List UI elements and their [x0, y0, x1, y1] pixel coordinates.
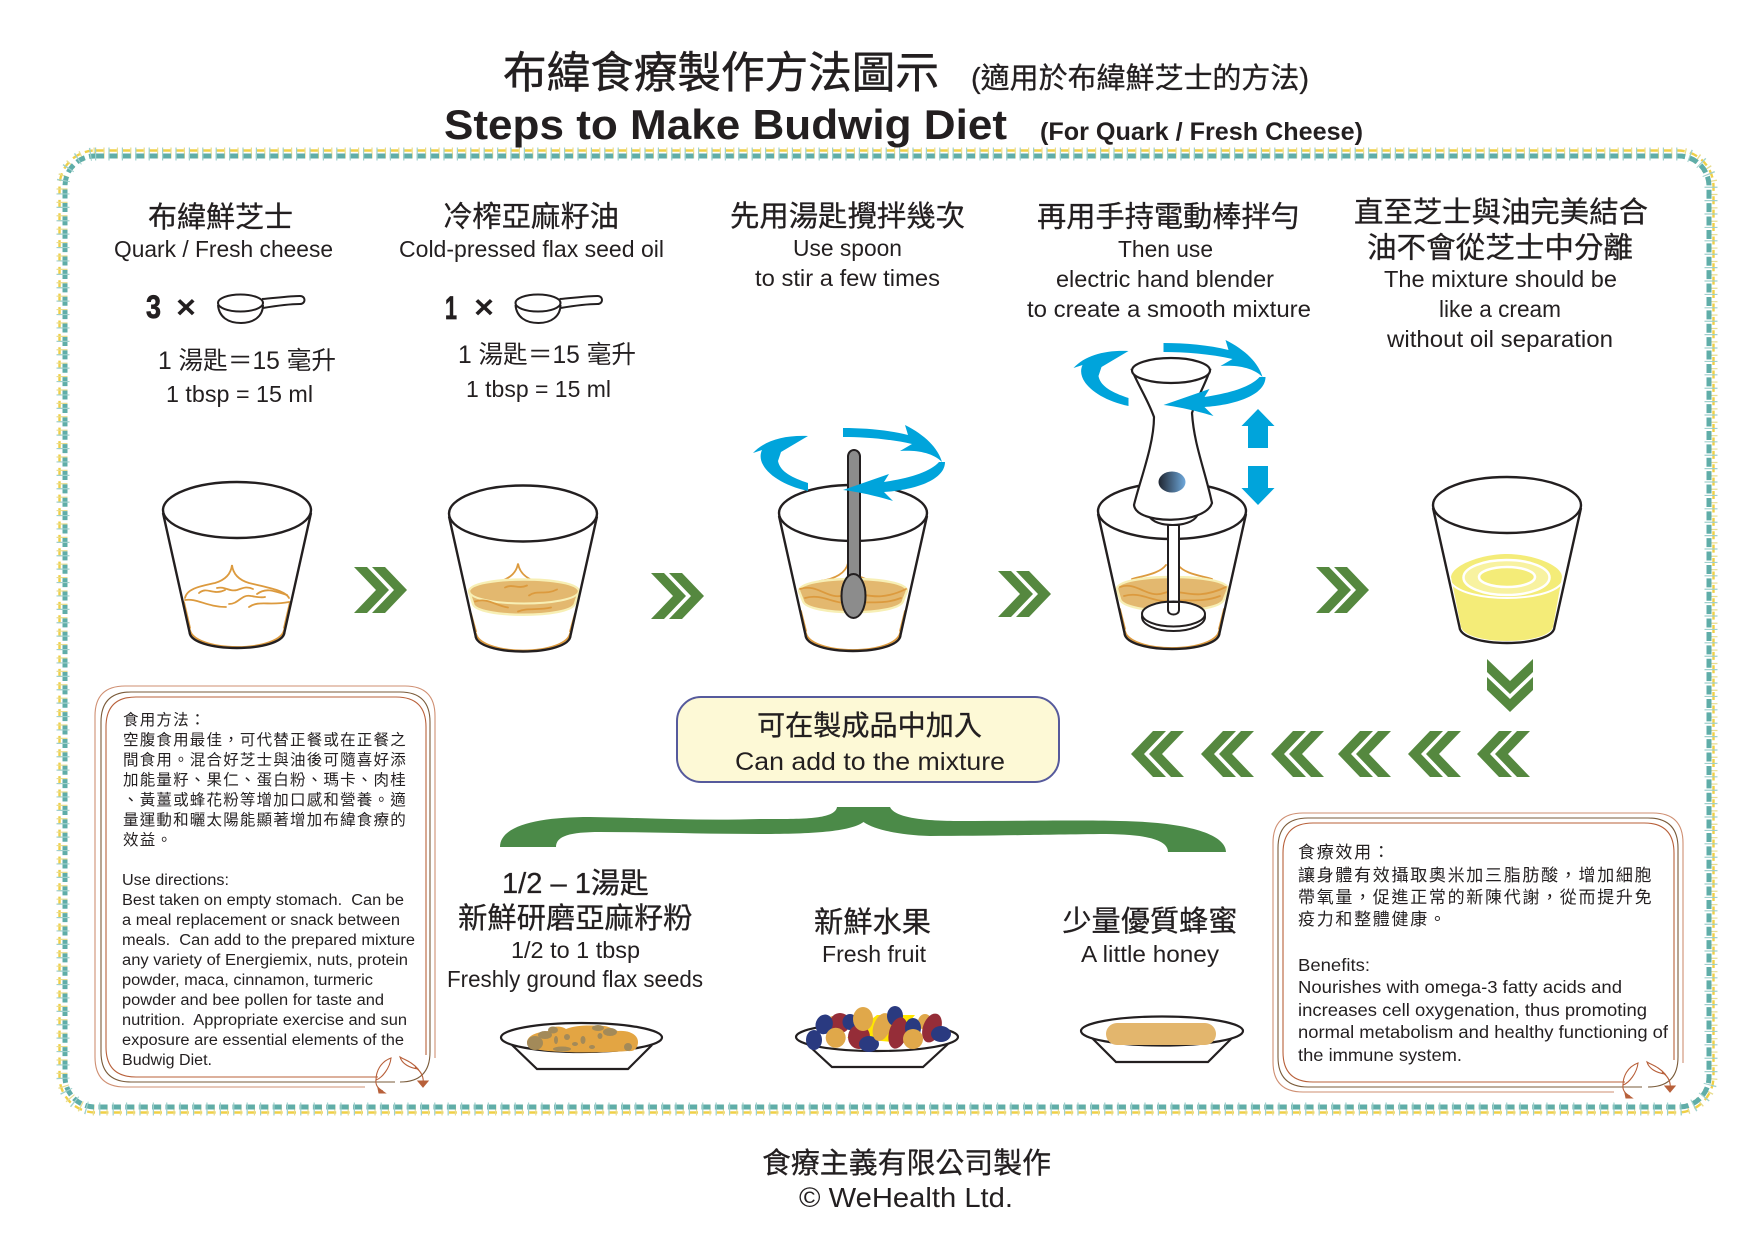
column 4: hand blender: electric hand blender: [1056, 266, 1274, 292]
text: chinese directions: 空腹食用最佳，可代替正餐或在正餐之: [123, 731, 407, 749]
text: english directions: nutrition. Appropriate exercise and sun: [122, 1012, 407, 1029]
cup 3: stirring with spoon: [753, 425, 945, 651]
arrows: leftward row: [1131, 731, 1530, 777]
cup 2: quark with oil: [449, 486, 597, 652]
title: 布緯食療製作方法圖示: [503, 50, 939, 98]
ingredient: fresh fruit: Fresh fruit: [822, 941, 927, 967]
column 4: hand blender: [1027, 200, 1311, 322]
ingredient: flax seeds: [447, 868, 703, 1069]
callout: can add to the mixture: Can add to the mixture: [735, 748, 1005, 776]
column 1: quark: 3: [146, 289, 161, 325]
column 1: quark: Quark / Fresh cheese: [114, 236, 333, 262]
text: english directions: Use directions:: [122, 872, 229, 889]
column 5: smooth result: [1354, 196, 1648, 352]
arrow: cup 1 to cup 2: [354, 567, 407, 613]
text: english directions: meals. Can add to the prepared mixture: [122, 932, 415, 949]
ingredient: flax seeds: 1/2 to 1 tbsp: [511, 937, 640, 963]
ingredient: honey: A little honey: [1081, 941, 1220, 967]
title: [444, 50, 1363, 148]
text: chinese directions: 食用方法：: [123, 711, 207, 729]
arrow: down: [1487, 659, 1533, 712]
title: (For Quark / Fresh Cheese): [1040, 118, 1363, 146]
ingredient: flax seeds: 新鮮研磨亞麻籽粉: [458, 902, 692, 935]
cup 1: quark: [163, 482, 311, 648]
icon: rotation arrows: [1074, 340, 1266, 416]
text: chinese directions: 加能量籽、果仁、蛋白粉、瑪卡、肉桂: [123, 771, 407, 789]
curly bracket: [500, 807, 1226, 852]
column 1: quark: 布緯鮮芝士: [148, 201, 293, 234]
text: english benefits: normal metabolism and healthy functioning of: [1298, 1022, 1668, 1042]
icon: bowl of honey: [1081, 1016, 1243, 1062]
column 2: flax oil: ×: [474, 289, 494, 325]
column 5: smooth result: 直至芝士與油完美結合: [1354, 196, 1648, 229]
text: english directions: Budwig Diet.: [122, 1052, 212, 1069]
text: english directions: any variety of Energiemix, nuts, protein: [122, 952, 408, 969]
callout: can add to the mixture: 可在製成品中加入: [757, 710, 982, 741]
icon: tablespoon: [218, 294, 304, 323]
ingredient: fresh fruit: [796, 906, 958, 1067]
footer credit: 食療主義有限公司製作: [762, 1147, 1051, 1180]
column 2: flax oil: [399, 200, 664, 402]
column 3: stir with spoon: Use spoon: [793, 235, 902, 261]
text: english directions: Best taken on empty stomach. Can be: [122, 892, 404, 909]
text: english benefits: [1298, 955, 1668, 1065]
text: chinese directions: [123, 711, 407, 849]
icon: spoon: [842, 450, 866, 618]
icon: bowl of ground seeds: [501, 1023, 662, 1069]
text: chinese benefits: [1298, 843, 1653, 929]
column 1: quark: ×: [176, 289, 196, 325]
ingredient: flax seeds: 1/2 – 1湯匙: [502, 868, 649, 900]
text: english directions: powder and bee pollen for taste and: [122, 992, 384, 1009]
column 2: flax oil: 1 tbsp = 15 ml: [466, 376, 611, 402]
text: english benefits: Nourishes with omega-3 fatty acids and: [1298, 977, 1622, 997]
column 2: flax oil: 1: [445, 290, 457, 326]
text: chinese directions: 效益。: [123, 831, 173, 849]
ingredient: honey: 少量優質蜂蜜: [1062, 905, 1237, 938]
text: english benefits: Benefits:: [1298, 955, 1370, 975]
title: Steps to Make Budwig Diet: [444, 101, 1007, 148]
text: chinese benefits: 疫力和整體健康。: [1298, 910, 1448, 929]
text: chinese directions: 、黃薑或蜂花粉等增加口感和營養。適: [123, 790, 407, 809]
decorative stitched frame: [60, 150, 1714, 1112]
flourish: [376, 1057, 428, 1093]
column 1: quark: [114, 201, 336, 407]
column 3: stir with spoon: 先用湯匙攪拌幾次: [730, 200, 965, 233]
text: english benefits: the immune system.: [1298, 1045, 1462, 1065]
text: english directions: a meal replacement or snack between: [122, 912, 400, 929]
column 2: flax oil: Cold-pressed flax seed oil: [399, 236, 664, 262]
cup 5: finished cream: [1433, 477, 1581, 643]
ingredient: flax seeds: Freshly ground flax seeds: [447, 966, 703, 992]
flourish: [1623, 1062, 1675, 1098]
text: chinese benefits: 帶氧量，促進正常的新陳代謝，從而提升免: [1298, 888, 1653, 907]
ingredient: fresh fruit: 新鮮水果: [814, 906, 931, 939]
column 3: stir with spoon: [730, 200, 965, 291]
text: english directions: [122, 872, 415, 1069]
column 3: stir with spoon: to stir a few times: [755, 265, 940, 291]
column 5: smooth result: The mixture should be: [1384, 266, 1617, 292]
text: english benefits: increases cell oxygenation, thus promoting: [1298, 1000, 1647, 1020]
callout: can add to the mixture: [677, 697, 1059, 782]
icon: hand blender: [1132, 358, 1212, 631]
panel: benefits: [1273, 813, 1683, 1098]
title: (適用於布緯鮮芝士的方法): [971, 62, 1309, 95]
column 5: smooth result: like a cream: [1439, 296, 1561, 322]
column 4: hand blender: 再用手持電動棒拌勻: [1037, 200, 1300, 234]
footer credit: [762, 1147, 1051, 1213]
column 2: flax oil: 冷榨亞麻籽油: [443, 200, 619, 234]
text: chinese directions: 間食用。混合好芝士與油後可隨喜好添: [123, 751, 407, 769]
column 5: smooth result: without oil separation: [1386, 326, 1613, 352]
icon: up and down arrows: [1242, 409, 1274, 505]
text: english directions: powder, maca, cinnamon, turmeric: [122, 972, 373, 989]
column 5: smooth result: 油不會從芝士中分離: [1367, 232, 1633, 264]
arrow: cup 3 to cup 4: [998, 571, 1051, 617]
cup 4: blending: [1074, 340, 1274, 649]
column 1: quark: 1 湯匙＝15 毫升: [158, 347, 336, 375]
column 4: hand blender: to create a smooth mixture: [1027, 296, 1311, 322]
footer credit: © WeHealth Ltd.: [799, 1182, 1013, 1213]
text: chinese benefits: 讓身體有效攝取奧米加三脂肪酸，增加細胞: [1298, 865, 1653, 885]
column 2: flax oil: 1 湯匙＝15 毫升: [458, 341, 636, 369]
icon: tablespoon: [516, 294, 602, 323]
icon: bowl of fruit: [796, 1006, 958, 1067]
text: chinese benefits: 食療效用：: [1298, 843, 1392, 862]
icon: rotation arrows: [753, 425, 945, 501]
arrow: cup 4 to cup 5: [1316, 567, 1369, 613]
ingredient: honey: [1062, 905, 1243, 1062]
panel: use directions: [95, 686, 435, 1093]
text: chinese directions: 量運動和曬太陽能顯著增加布緯食療的: [123, 811, 407, 829]
text: english directions: exposure are essential elements of the: [122, 1032, 404, 1049]
column 4: hand blender: Then use: [1118, 236, 1213, 262]
arrow: cup 2 to cup 3: [651, 573, 704, 619]
column 1: quark: 1 tbsp = 15 ml: [166, 381, 313, 407]
